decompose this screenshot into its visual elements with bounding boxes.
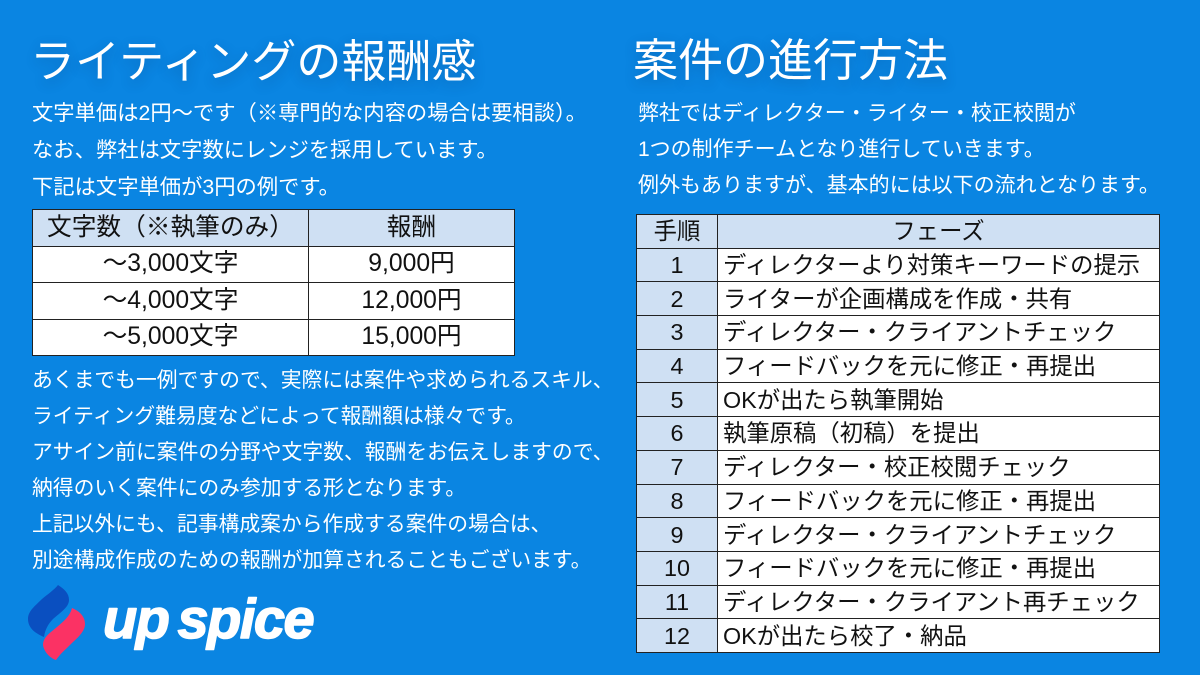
text block: intro right: 弊社ではディレクター・ライター・校正校閲が	[638, 102, 1076, 125]
table: process steps: ディレクター・クライアントチェック	[723, 319, 1116, 345]
table: reward examples: 9,000円	[368, 250, 455, 277]
table: process steps: 3	[670, 319, 683, 345]
table: process steps: 5	[670, 387, 683, 413]
table: reward examples: 文字数（※執筆のみ）	[47, 214, 294, 241]
text block: notes left: 上記以外にも、記事構成案から作成する案件の場合は、	[32, 513, 551, 536]
table: process steps: ディレクターより対策キーワードの提示	[723, 252, 1140, 278]
table: process steps: ライターが企画構成を作成・共有	[723, 286, 1072, 312]
table: process steps: 2	[670, 286, 683, 312]
table: process steps: 7	[670, 454, 683, 480]
table: process steps: フェーズ	[892, 218, 985, 244]
text block: notes left: アサイン前に案件の分野や文字数、報酬をお伝えしますので、	[32, 441, 613, 464]
text block: intro left: 文字単価は2円〜です（※専門的な内容の場合は要相談）。	[32, 101, 587, 125]
text block: intro left: 下記は文字単価が3円の例です。	[32, 175, 340, 199]
text block: intro right: 1つの制作チームとなり進行していきます。	[638, 138, 1045, 161]
table: process steps: 8	[670, 488, 683, 514]
table: process steps: 手順	[654, 218, 700, 244]
text block: intro right	[638, 102, 1160, 197]
table: reward examples: 〜5,000文字	[103, 323, 238, 350]
text block: notes left: ライティング難易度などによって報酬額は様々です。	[32, 405, 526, 428]
table: reward examples: 報酬	[387, 214, 436, 241]
logo: up spice	[28, 585, 314, 660]
table: process steps: 9	[670, 522, 683, 548]
text block: notes left: あくまでも一例ですので、実際には案件や求められるスキル、	[32, 369, 613, 392]
text block: intro left	[32, 101, 587, 199]
wordmark: up spice	[103, 587, 314, 650]
title: reward: ライティングの報酬感	[30, 36, 476, 87]
table: process steps: ディレクター・校正校閲チェック	[723, 454, 1071, 480]
table: reward examples: 15,000円	[361, 323, 462, 350]
text block: notes left	[32, 369, 613, 572]
table: reward examples: 〜3,000文字	[103, 250, 238, 277]
text block: intro right: 例外もありますが、基本的には以下の流れとなります。	[638, 174, 1160, 197]
table: reward examples: 〜4,000文字	[103, 287, 238, 314]
title: process: 案件の進行方法	[633, 35, 948, 86]
table: reward examples: 12,000円	[361, 287, 462, 314]
text block: intro left: なお、弊社は文字数にレンジを採用しています。	[32, 138, 498, 162]
table: process steps: 11	[665, 589, 689, 615]
table: process steps: ディレクター・クライアント再チェック	[723, 589, 1140, 615]
table: process steps: フィードバックを元に修正・再提出	[723, 353, 1096, 379]
table: process steps: 10	[664, 555, 690, 581]
table: reward examples	[32, 209, 515, 356]
icon: logo mark	[28, 585, 85, 660]
text block: notes left: 納得のいく案件にのみ参加する形となります。	[32, 477, 466, 500]
table: process steps: フィードバックを元に修正・再提出	[723, 488, 1096, 514]
table: process steps	[636, 214, 1160, 653]
table: process steps: 執筆原稿（初稿）を提出	[723, 420, 980, 446]
table: process steps: 1	[670, 252, 683, 278]
text block: notes left: 別途構成作成のための報酬が加算されることもございます。	[32, 549, 591, 572]
table: process steps: OKが出たら執筆開始	[723, 387, 943, 413]
table: process steps: OKが出たら校了・納品	[723, 623, 967, 649]
table: process steps: ディレクター・クライアントチェック	[723, 522, 1116, 548]
table: process steps: フィードバックを元に修正・再提出	[723, 555, 1096, 581]
table: process steps: 4	[670, 353, 683, 379]
table: process steps: 12	[664, 623, 690, 649]
table: process steps: 6	[670, 420, 683, 446]
